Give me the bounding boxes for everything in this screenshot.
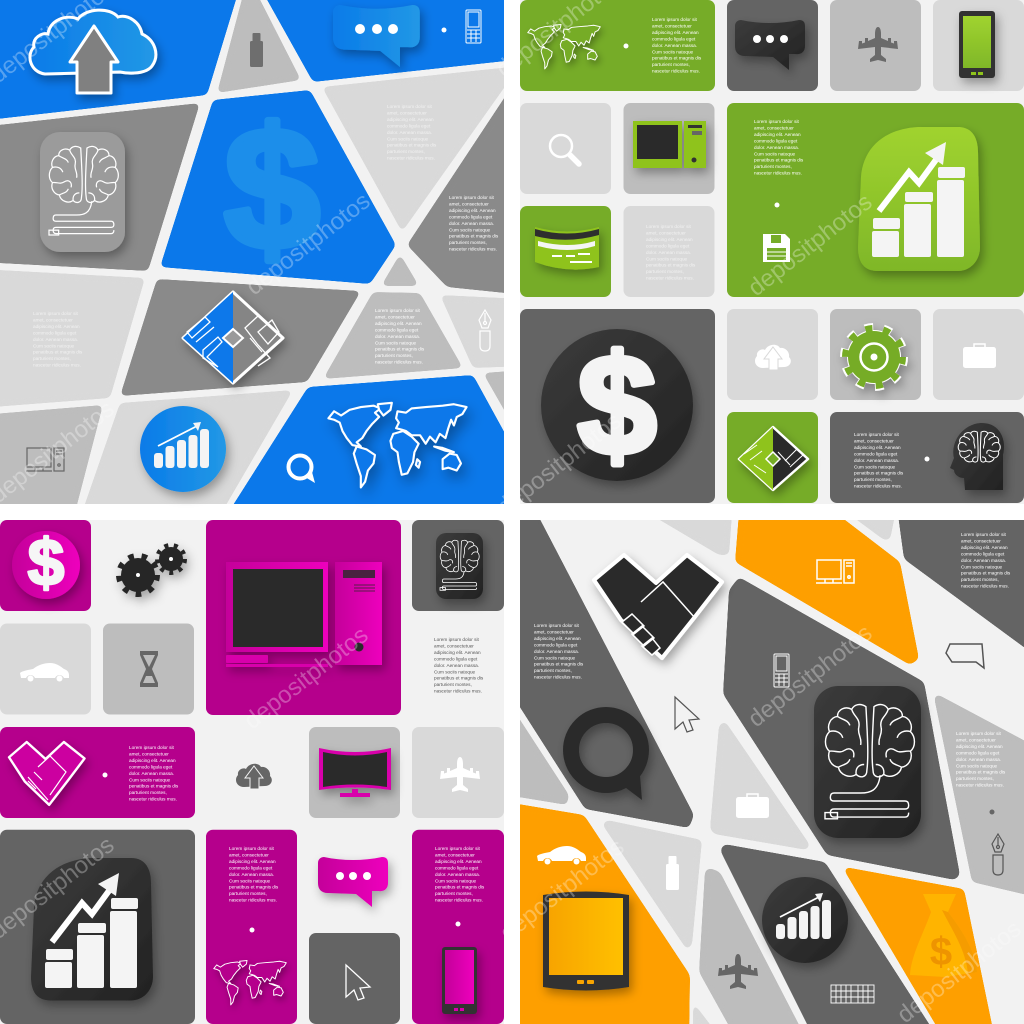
text block: amet, consectetuer: [961, 538, 1001, 543]
icon: car: [537, 846, 586, 864]
text block: dolor. Aenean massa.: [854, 458, 899, 463]
gray tile: computer: [624, 103, 714, 194]
icon: smartphone: [442, 947, 477, 1014]
green tile: card: [520, 206, 611, 297]
text block: nascetur ridiculus mus.: [375, 360, 423, 365]
text block: penatibus et magnis dis: [854, 471, 904, 476]
icon: head with brain: [950, 423, 1004, 490]
text block: penatibus et magnis dis: [33, 350, 83, 355]
icon: computer white: [816, 560, 854, 583]
text block: commodo ligula eget: [229, 865, 273, 870]
icon: money bag: $: [930, 930, 952, 974]
text block: Lorem ipsum dolor sit: [961, 532, 1007, 537]
gray tile: tv: [309, 727, 400, 818]
text block: nascetur ridiculus mus.: [387, 156, 435, 161]
text block: dolor. Aenean massa.: [961, 558, 1006, 563]
text block: commodo ligula eget: [854, 451, 898, 456]
text block: penatibus et magnis dis: [375, 347, 425, 352]
text block: amet, consectetuer: [129, 751, 169, 756]
text block: commodo ligula eget: [435, 865, 479, 870]
big dark tile: chart: [0, 830, 195, 1024]
icon: growth chart card: [858, 127, 980, 271]
text block: parturient montes,: [652, 62, 690, 67]
icon: phone outline: [774, 654, 789, 687]
text block: adipiscing elit. Aenean: [961, 545, 1008, 550]
panel background: [0, 520, 504, 1024]
icon: briefcase: [963, 344, 996, 368]
text block: Lorem ipsum dolor sit: [375, 308, 421, 313]
text block: nascetur ridiculus mus.: [854, 484, 902, 489]
text block: dolor. Aenean massa.: [229, 872, 274, 877]
text block: dolor. Aenean massa.: [435, 872, 480, 877]
text block: Lorem ipsum dolor sit: [646, 224, 692, 229]
icon: gears: [121, 547, 183, 592]
text block: Cum sociis natoque: [854, 464, 896, 469]
light tile: [933, 0, 1024, 91]
light tile: magnifier: [520, 103, 611, 194]
text block: nascetur ridiculus mus.: [956, 783, 1004, 788]
icon: growth chart circle: [140, 406, 226, 492]
gray tile: gear: [830, 309, 921, 400]
text block: amet, consectetuer: [534, 629, 574, 634]
icon: bubble outline: [946, 644, 984, 668]
text block: Lorem ipsum dolor sit: [754, 119, 800, 124]
text block: parturient montes,: [754, 164, 792, 169]
light tile: car: [0, 624, 91, 714]
icon: pen nib: [479, 310, 491, 351]
icon: usb drive: [250, 33, 263, 67]
text block: parturient montes,: [434, 682, 472, 687]
text block: parturient montes,: [375, 353, 413, 358]
icon: plane: [440, 757, 480, 792]
text block: nascetur ridiculus mus.: [33, 363, 81, 368]
magenta tile: handshake and text: [0, 727, 195, 818]
dot: [442, 28, 446, 32]
text block: commodo ligula eget: [375, 327, 419, 332]
tall magenta tile: [412, 830, 504, 1024]
panel: blue polygon infographic: [0, 0, 524, 524]
icon: plane: [718, 954, 758, 989]
text block: Cum sociis natoque: [434, 669, 476, 674]
text block: amet, consectetuer: [435, 852, 475, 857]
text block: penatibus et magnis dis: [129, 784, 179, 789]
text block: commodo ligula eget: [434, 656, 478, 661]
icon: car: [20, 663, 69, 682]
dot: [924, 456, 930, 462]
text block: penatibus et magnis dis: [435, 885, 485, 890]
dot: [990, 810, 994, 814]
text block: adipiscing elit. Aenean: [956, 744, 1003, 749]
icon: handshake heart: [9, 742, 85, 805]
text block: parturient montes,: [229, 891, 267, 896]
icon: hourglass: [140, 651, 158, 687]
watermarks: depositphotos: [743, 619, 877, 733]
watermarks: depositphotos: [743, 188, 877, 302]
text block: nascetur ridiculus mus.: [534, 675, 582, 680]
light tile: cloud: [727, 309, 818, 400]
text block: commodo ligula eget: [652, 36, 696, 41]
text block: commodo ligula eget: [754, 138, 798, 143]
text block: adipiscing elit. Aenean: [435, 859, 482, 864]
text block: adipiscing elit. Aenean: [854, 445, 901, 450]
icon: blue speech bubble: [333, 5, 420, 67]
text block: Lorem ipsum dolor sit: [534, 623, 580, 628]
light tile: text: [624, 206, 714, 297]
dark tile: [727, 0, 818, 91]
text block: dolor. Aenean massa.: [449, 221, 494, 226]
text block: commodo ligula eget: [449, 214, 493, 219]
icon: handshake diamond: [739, 427, 808, 490]
text block: Cum sociis natoque: [534, 655, 576, 660]
gray tile: hourglass: [103, 624, 194, 714]
icon: brain card: [436, 533, 483, 599]
text block: commodo ligula eget: [33, 330, 77, 335]
icon: cursor outline: [675, 697, 699, 732]
icon: magenta computer: [226, 562, 382, 667]
panel: green tile infographic: [520, 0, 1024, 504]
icon: cloud upload white: [755, 345, 791, 370]
icon: location bubble: [288, 456, 315, 483]
panel background: [0, 0, 504, 504]
text block: Lorem ipsum dolor sit: [956, 731, 1002, 736]
text block: adipiscing elit. Aenean: [387, 117, 434, 122]
text block: Cum sociis natoque: [646, 256, 688, 261]
watermarks: depositphotos: [239, 621, 373, 735]
text block: commodo ligula eget: [387, 123, 431, 128]
text block: amet, consectetuer: [646, 230, 686, 235]
text block: Lorem ipsum dolor sit: [434, 637, 480, 642]
text block: parturient montes,: [449, 240, 487, 245]
icon: keyboard: [831, 985, 874, 1003]
text block: parturient montes,: [129, 790, 167, 795]
icon: phone outline: [466, 10, 481, 43]
text block: Lorem ipsum dolor sit: [129, 745, 175, 750]
text block: adipiscing elit. Aenean: [434, 650, 481, 655]
text block: amet, consectetuer: [652, 23, 692, 28]
panel: magenta tile infographic: [0, 520, 504, 1024]
light tile: plane: [412, 727, 504, 818]
text block: dolor. Aenean massa.: [375, 334, 420, 339]
text block: Lorem ipsum dolor sit: [387, 104, 433, 109]
icon: dollar circle: $: [28, 525, 64, 599]
text block: amet, consectetuer: [754, 125, 794, 130]
green tile: map and text: [520, 0, 715, 91]
icon: brain card: [40, 132, 125, 252]
icon: tablet: [543, 892, 629, 990]
big magenta tile: computer: [206, 520, 401, 715]
icon: dollar circle: $: [578, 326, 656, 485]
text block: Cum sociis natoque: [652, 49, 694, 54]
panel: orange polygon infographic: [500, 500, 1024, 1024]
watermarks: depositphotos: [495, 833, 629, 947]
text block: amet, consectetuer: [229, 852, 269, 857]
text block: dolor. Aenean massa.: [33, 337, 78, 342]
icon: credit card: [535, 227, 599, 270]
text block: Cum sociis natoque: [387, 136, 429, 141]
text block: adipiscing elit. Aenean: [534, 636, 581, 641]
text block: penatibus et magnis dis: [449, 234, 499, 239]
text block: adipiscing elit. Aenean: [229, 859, 276, 864]
text block: adipiscing elit. Aenean: [33, 324, 80, 329]
text block: parturient montes,: [646, 269, 684, 274]
text block: parturient montes,: [961, 577, 999, 582]
icon: brain card: [814, 686, 921, 838]
text block: parturient montes,: [387, 149, 425, 154]
text block: nascetur ridiculus mus.: [652, 69, 700, 74]
text block: Cum sociis natoque: [33, 343, 75, 348]
icon: computer: [26, 448, 64, 471]
icon: world map: [528, 24, 600, 69]
text block: amet, consectetuer: [449, 201, 489, 206]
icon: dollar sign: $: [224, 93, 320, 285]
icon: dark speech bubble: [735, 20, 805, 70]
text block: amet, consectetuer: [956, 737, 996, 742]
text block: dolor. Aenean massa.: [129, 771, 174, 776]
text block: adipiscing elit. Aenean: [129, 758, 176, 763]
text block: Lorem ipsum dolor sit: [449, 195, 495, 200]
text block: parturient montes,: [854, 477, 892, 482]
text block: Cum sociis natoque: [229, 878, 271, 883]
text block: nascetur ridiculus mus.: [754, 171, 802, 176]
dark tile: brain: [412, 520, 504, 611]
dot: [250, 928, 254, 932]
text block: dolor. Aenean massa.: [387, 130, 432, 135]
text block: adipiscing elit. Aenean: [652, 30, 699, 35]
big green tile: [727, 103, 1024, 297]
text block: amet, consectetuer: [33, 317, 73, 322]
text block: amet, consectetuer: [387, 110, 427, 115]
icon: green computer: [633, 121, 706, 168]
text block: adipiscing elit. Aenean: [375, 321, 422, 326]
icon: cloud upload dark: [236, 764, 272, 789]
polygon tiles: [500, 500, 1024, 1024]
dark tile: cursor: [309, 933, 400, 1024]
text block: parturient montes,: [956, 776, 994, 781]
text block: commodo ligula eget: [961, 551, 1005, 556]
text block: nascetur ridiculus mus.: [129, 797, 177, 802]
icon: dollar circle: [541, 326, 693, 485]
text block: Cum sociis natoque: [375, 340, 417, 345]
text block: penatibus et magnis dis: [229, 885, 279, 890]
dot: [774, 202, 780, 208]
text block: Lorem ipsum dolor sit: [33, 311, 79, 316]
magenta tile: dollar: [0, 520, 91, 611]
text block: amet, consectetuer: [375, 314, 415, 319]
text block: dolor. Aenean massa.: [434, 663, 479, 668]
dot: [102, 772, 108, 778]
dot: [624, 44, 628, 48]
text block: commodo ligula eget: [534, 642, 578, 647]
text block: Cum sociis natoque: [129, 777, 171, 782]
text block: penatibus et magnis dis: [387, 143, 437, 148]
text block: parturient montes,: [534, 668, 572, 673]
text block: Cum sociis natoque: [961, 564, 1003, 569]
text block: nascetur ridiculus mus.: [229, 898, 277, 903]
icon: magnifier: [550, 135, 579, 164]
text block: penatibus et magnis dis: [956, 770, 1006, 775]
green tile: handshake: [727, 412, 818, 503]
icon: cursor: [346, 965, 370, 1000]
icon: growth chart circle: [762, 877, 848, 963]
icon: money bag: [910, 894, 977, 977]
tall magenta tile: [206, 830, 297, 1024]
icon: usb drive: [666, 856, 679, 890]
icon: world map: [328, 403, 467, 487]
text block: dolor. Aenean massa.: [534, 649, 579, 654]
text block: nascetur ridiculus mus.: [961, 584, 1009, 589]
icon: floppy disk: [763, 234, 790, 262]
icon: world map: [214, 960, 286, 1005]
dark tile: head: [830, 412, 1024, 503]
text block: penatibus et magnis dis: [534, 662, 584, 667]
text block: Lorem ipsum dolor sit: [435, 846, 481, 851]
icon: dollar circle: [12, 525, 80, 599]
icon: briefcase: [736, 794, 769, 818]
text block: Lorem ipsum dolor sit: [229, 846, 275, 851]
text block: nascetur ridiculus mus.: [449, 247, 497, 252]
text block: penatibus et magnis dis: [434, 676, 484, 681]
text block: adipiscing elit. Aenean: [449, 208, 496, 213]
watermarks: depositphotos: [492, 407, 626, 521]
polygon tiles: [0, 0, 524, 524]
icon: growth chart card: [31, 858, 153, 1001]
text block: nascetur ridiculus mus.: [435, 898, 483, 903]
text block: nascetur ridiculus mus.: [646, 276, 694, 281]
icon: handshake diamond: [183, 292, 283, 383]
panel background: [520, 0, 1024, 504]
icon: gear: [847, 330, 901, 384]
text block: Cum sociis natoque: [956, 763, 998, 768]
text block: Cum sociis natoque: [449, 227, 491, 232]
text block: amet, consectetuer: [434, 643, 474, 648]
text block: dolor. Aenean massa.: [652, 43, 697, 48]
icon: pen nib: [992, 834, 1004, 875]
text block: Cum sociis natoque: [435, 878, 477, 883]
text block: adipiscing elit. Aenean: [646, 237, 693, 242]
icon: location bubble dark: [571, 715, 642, 800]
text block: Lorem ipsum dolor sit: [652, 17, 698, 22]
icon: plane: [858, 27, 898, 62]
text block: amet, consectetuer: [854, 438, 894, 443]
text block: commodo ligula eget: [129, 764, 173, 769]
icon: magenta speech bubble: [318, 857, 388, 907]
light tile: briefcase: [933, 309, 1024, 400]
dot: [456, 922, 460, 926]
text block: dolor. Aenean massa.: [646, 250, 691, 255]
icon: handshake black: [594, 555, 722, 658]
big dark tile: [520, 309, 715, 503]
text block: commodo ligula eget: [646, 243, 690, 248]
icon: curved tv: [319, 748, 391, 797]
watermarks: depositphotos: [241, 187, 375, 301]
text block: Cum sociis natoque: [754, 151, 796, 156]
text block: dolor. Aenean massa.: [754, 145, 799, 150]
text block: parturient montes,: [33, 356, 71, 361]
gray tile: [830, 0, 921, 91]
text block: commodo ligula eget: [956, 750, 1000, 755]
panel background: [520, 520, 1024, 1024]
text block: penatibus et magnis dis: [961, 571, 1011, 576]
text block: adipiscing elit. Aenean: [754, 132, 801, 137]
text block: nascetur ridiculus mus.: [434, 689, 482, 694]
text block: Lorem ipsum dolor sit: [854, 432, 900, 437]
text block: parturient montes,: [435, 891, 473, 896]
text block: penatibus et magnis dis: [652, 56, 702, 61]
text block: penatibus et magnis dis: [646, 263, 696, 268]
icon: cloud upload: [30, 10, 156, 93]
text block: penatibus et magnis dis: [754, 158, 804, 163]
text block: dolor. Aenean massa.: [956, 757, 1001, 762]
icon: smartphone: [959, 11, 995, 78]
